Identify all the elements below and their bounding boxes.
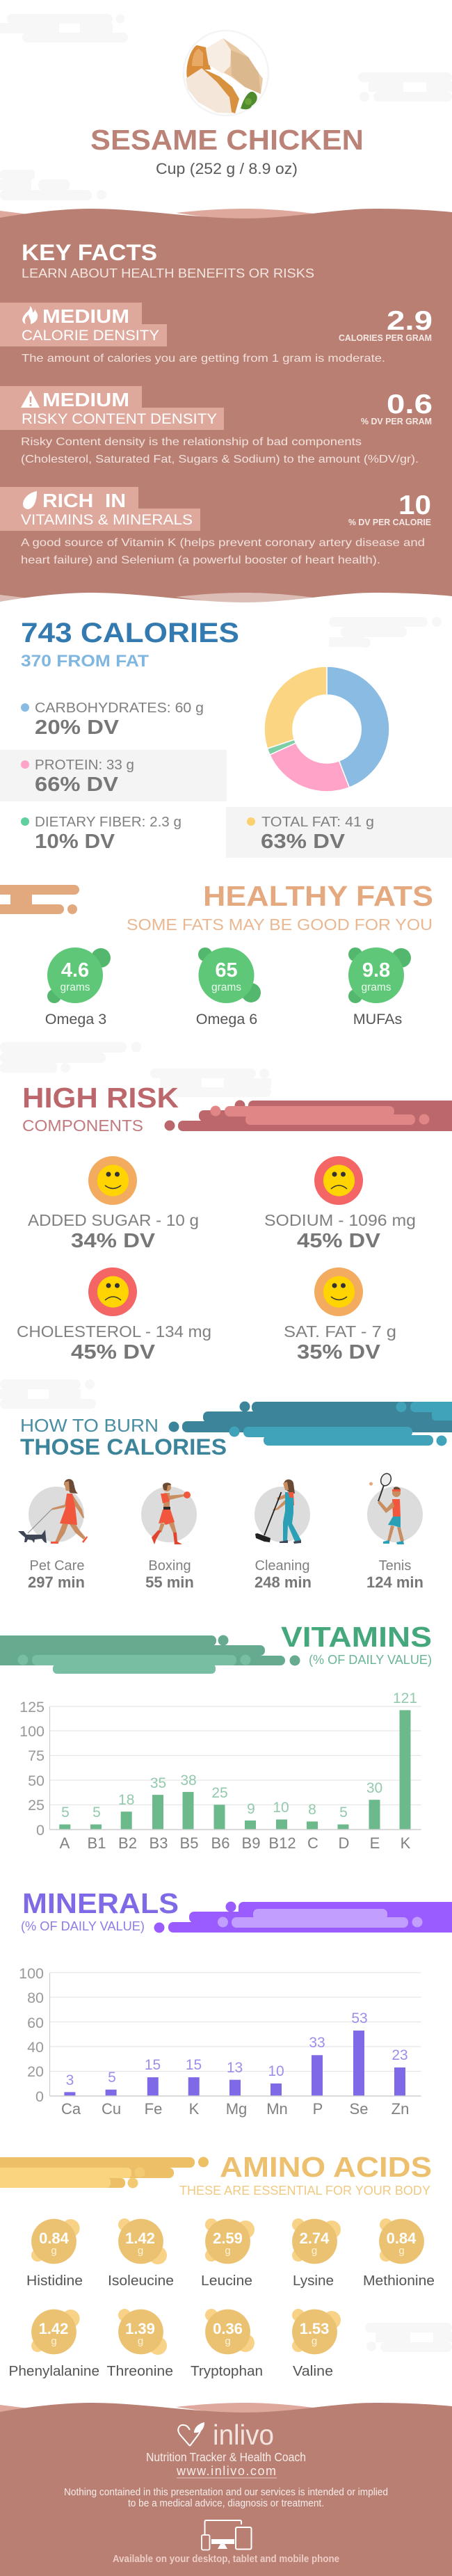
heading: how to burn: HOW TO BURN <box>20 1415 159 1436</box>
banner shape <box>164 1101 452 1131</box>
label: pet care: 297 min <box>28 1574 85 1591</box>
unit: % DV PER GRAM <box>361 417 432 426</box>
icon: flame <box>22 306 38 324</box>
stat: omega 6 <box>196 947 261 1027</box>
disclaimer <box>64 2486 388 2509</box>
banner shape <box>0 1635 300 1674</box>
stat: omega 3: 4.6 <box>61 959 89 982</box>
panel: vitamins <box>0 1621 432 1852</box>
item: cholesterol: CHOLESTEROL - 134 mg <box>17 1322 211 1341</box>
item: added sugar: ADDED SUGAR - 10 g <box>28 1211 199 1229</box>
bar chart: vitamins: 125 <box>19 1699 45 1715</box>
stat: mufas <box>348 947 411 1027</box>
amino: tryptophan: 0.36 <box>213 2320 243 2337</box>
item: sodium: 45% DV <box>297 1230 381 1252</box>
panel: high risk components <box>17 1082 452 1363</box>
label: tenis: 124 min <box>366 1574 423 1591</box>
bar chart: vitamins: 9 <box>247 1801 255 1817</box>
value: 2.9 <box>387 306 433 336</box>
legend: carbohydrates <box>21 700 204 739</box>
description: A good source of Vitamin K (helps prevent coronary artery disease and <box>21 537 425 549</box>
bar chart: vitamins: 5 <box>339 1805 348 1821</box>
stat: omega 3: grams <box>60 982 90 993</box>
item: sodium <box>264 1156 416 1252</box>
fact: risky content density <box>0 386 433 465</box>
unit: CALORIES PER GRAM <box>339 333 432 343</box>
bar chart: minerals: 5 <box>108 2070 116 2086</box>
bar chart: vitamins: 8 <box>308 1802 316 1818</box>
bar chart: minerals: 40 <box>27 2039 44 2056</box>
availability note: Available on your desktop, tablet and mobile phone <box>113 2553 339 2565</box>
bar chart: vitamins: B1 <box>88 1834 106 1852</box>
activity: cleaning <box>255 1480 310 1544</box>
label: pet care <box>28 1558 85 1591</box>
bar chart: minerals: 53 <box>351 2010 368 2026</box>
fact: calorie density <box>0 303 433 365</box>
bar chart: minerals: 33 <box>309 2035 325 2051</box>
bar chart: minerals: P <box>313 2100 323 2118</box>
item: saturated fat: 35% DV <box>297 1341 381 1363</box>
highlight box: protein <box>0 750 227 801</box>
highlight box: total fat <box>226 807 452 858</box>
bar chart: vitamins: K <box>401 1834 411 1852</box>
bar chart: minerals: K <box>189 2100 200 2118</box>
amino: isoleucine <box>108 2218 174 2289</box>
label: RISKY CONTENT DENSITY <box>22 411 217 427</box>
amino: lysine: g <box>312 2245 317 2257</box>
amino: threonine: 1.39 <box>125 2320 155 2337</box>
stat: omega 6: 65 <box>215 959 238 982</box>
amino: lysine <box>292 2218 341 2289</box>
panel: minerals <box>19 1887 452 2118</box>
bar chart: minerals: 15 <box>145 2057 161 2073</box>
bar chart: vitamins: A <box>60 1834 70 1852</box>
amino: methionine <box>363 2218 435 2289</box>
description: heart failure) and Selenium (a powerful booster of heart health). <box>21 554 380 566</box>
icon: warning triangle <box>21 390 40 408</box>
amino: lysine: 2.74 <box>300 2230 330 2247</box>
amino: phenylalanine: g <box>51 2335 57 2347</box>
panel: calories and macronutrients <box>0 618 452 858</box>
bar chart: vitamins: E <box>370 1834 380 1852</box>
donut chart <box>264 666 389 792</box>
serving size: Cup (252 g / 8.9 oz) <box>156 160 298 177</box>
amino: valine: Valine <box>293 2364 333 2379</box>
bar chart: vitamins: 25 <box>211 1785 228 1801</box>
amino: leucine: g <box>225 2245 231 2257</box>
label: VITAMINS & MINERALS <box>21 512 193 528</box>
bar chart: vitamins: 50 <box>28 1773 45 1789</box>
fact: rich in vitamins and minerals <box>0 487 431 566</box>
bar chart: minerals: 13 <box>227 2060 243 2076</box>
disclaimer: Nothing contained in this presentation and our services is intended or implied <box>64 2486 388 2498</box>
tagline: Nutrition Tracker & Health Coach <box>146 2450 306 2464</box>
subheading: calories from fat: 370 FROM FAT <box>21 652 149 671</box>
rating: MEDIUM <box>42 389 129 410</box>
website link: www.inlivo.com <box>176 2464 276 2478</box>
amino: threonine <box>107 2309 173 2379</box>
bar chart: vitamins: 25 <box>28 1797 45 1814</box>
legend: total fat: TOTAL FAT: 41 g <box>261 814 374 830</box>
label: boxing <box>145 1558 194 1591</box>
bar chart: minerals: 15 <box>186 2057 202 2073</box>
panel: food header <box>90 31 364 177</box>
bar chart: vitamins: 18 <box>118 1792 134 1808</box>
legend: carbohydrates: CARBOHYDRATES: 60 g <box>35 700 204 716</box>
amino: methionine: Methionine <box>363 2273 435 2289</box>
legend: protein: PROTEIN: 33 g <box>35 757 134 773</box>
amino: phenylalanine <box>8 2310 99 2379</box>
legend: carbohydrates: 20% DV <box>35 717 120 739</box>
bar chart: vitamins: B5 <box>180 1834 198 1852</box>
panel: footer <box>0 2403 452 2576</box>
bar chart: minerals: 80 <box>27 1990 44 2006</box>
amino: valine: 1.53 <box>300 2320 329 2337</box>
bar chart: vitamins: B6 <box>211 1834 229 1852</box>
item: added sugar: 34% DV <box>71 1230 156 1252</box>
label: CALORIE DENSITY <box>22 328 159 344</box>
amino: methionine: g <box>398 2245 405 2257</box>
bar chart: minerals: 0 <box>35 2088 44 2105</box>
heading: calories: 743 CALORIES <box>21 618 239 648</box>
bar chart: minerals: 60 <box>27 2015 44 2031</box>
bar chart: vitamins: 121 <box>393 1690 417 1706</box>
legend: dietary fiber: 10% DV <box>35 831 115 853</box>
activity: tennis <box>367 1472 423 1544</box>
bar chart: vitamins <box>19 1690 421 1852</box>
description <box>21 537 425 566</box>
bar chart: vitamins: B9 <box>242 1834 260 1852</box>
subheading: (% OF DAILY VALUE) <box>309 1653 432 1667</box>
label: cleaning: 248 min <box>255 1574 312 1591</box>
heading: those calories: THOSE CALORIES <box>20 1434 227 1459</box>
heading: key facts: KEY FACTS <box>22 240 157 265</box>
bar chart: vitamins: B3 <box>150 1834 168 1852</box>
heading: HIGH RISK <box>22 1082 179 1114</box>
bar chart: vitamins: 38 <box>180 1773 197 1789</box>
heading: AMINO ACIDS <box>220 2151 432 2183</box>
stat: omega 6: grams <box>211 982 241 993</box>
heading: MINERALS <box>22 1887 179 1919</box>
bar chart: vitamins: 35 <box>150 1775 166 1791</box>
item: cholesterol: 45% DV <box>71 1341 156 1363</box>
amino: histidine: 0.84 <box>39 2230 70 2247</box>
label: tenis: Tenis <box>379 1558 411 1574</box>
legend: total fat <box>247 814 374 853</box>
description: The amount of calories you are getting from 1 gram is moderate. <box>22 353 385 365</box>
panel: amino acids <box>0 2151 435 2379</box>
amino: leucine: Leucine <box>201 2273 252 2289</box>
amino: valine: g <box>312 2335 317 2347</box>
amino: tryptophan: g <box>225 2335 231 2347</box>
item: cholesterol <box>17 1267 211 1363</box>
item: added sugar <box>28 1156 199 1252</box>
description: (Cholesterol, Saturated Fat, Sugars & Sodium) to the amount (%DV/gr). <box>21 454 419 465</box>
bar chart: minerals: Ca <box>61 2100 81 2118</box>
bar chart: vitamins: 10 <box>273 1800 289 1816</box>
logo: inlivo: inlivo <box>213 2419 274 2451</box>
banner shape <box>154 1902 452 1933</box>
amino: leucine: 2.59 <box>213 2230 243 2247</box>
bar chart: vitamins: 100 <box>19 1723 45 1740</box>
bar chart: minerals <box>19 1965 421 2118</box>
label: cleaning <box>255 1558 312 1591</box>
bar chart: vitamins: 30 <box>366 1780 382 1796</box>
amino: valine <box>292 2309 341 2379</box>
legend: protein: 66% DV <box>35 774 119 796</box>
amino: isoleucine: Isoleucine <box>108 2273 174 2289</box>
stat: omega 3 <box>45 947 111 1027</box>
amino: methionine: 0.84 <box>387 2230 417 2247</box>
bar chart: vitamins: B12 <box>268 1834 296 1852</box>
amino: isoleucine: 1.42 <box>125 2230 155 2247</box>
item: saturated fat: SAT. FAT - 7 g <box>284 1322 396 1341</box>
label: cleaning: Cleaning <box>255 1558 309 1574</box>
panel: healthy fats <box>0 880 433 1027</box>
amino: lysine: Lysine <box>293 2273 334 2289</box>
amino: threonine: Threonine <box>107 2364 173 2379</box>
bar chart: vitamins: 5 <box>61 1805 70 1821</box>
amino: histidine: g <box>51 2245 57 2257</box>
item: saturated fat <box>284 1267 396 1363</box>
bar chart: minerals: 23 <box>392 2047 408 2063</box>
banner shape <box>168 1401 452 1446</box>
bar chart: minerals: Se <box>350 2100 368 2118</box>
activity: boxing <box>141 1482 197 1544</box>
unit: % DV PER CALORIE <box>348 518 431 527</box>
amino: phenylalanine: Phenylalanine <box>8 2364 99 2379</box>
title: SESAME CHICKEN <box>90 124 364 156</box>
stat: mufas: grams <box>361 982 392 993</box>
bar chart: minerals: Fe <box>145 2100 162 2118</box>
description: Risky Content density is the relationship of bad components <box>21 436 362 448</box>
label: tenis <box>366 1558 423 1591</box>
legend: total fat: 63% DV <box>261 831 346 853</box>
bar chart: vitamins: B2 <box>118 1834 137 1852</box>
description <box>21 436 419 465</box>
legend: protein <box>21 757 134 796</box>
subheading: LEARN ABOUT HEALTH BENEFITS OR RISKS <box>22 266 314 280</box>
subheading: THESE ARE ESSENTIAL FOR YOUR BODY <box>179 2183 430 2198</box>
bar chart: vitamins: 75 <box>28 1747 45 1764</box>
icon: devices <box>202 2520 252 2550</box>
logo: inlivo <box>178 2419 274 2451</box>
bar chart: minerals: 10 <box>268 2063 284 2079</box>
stat: mufas: 9.8 <box>362 959 390 982</box>
stat: omega 6: Omega 6 <box>196 1011 257 1027</box>
amino: isoleucine: g <box>138 2245 143 2257</box>
subheading: SOME FATS MAY BE GOOD FOR YOU <box>127 915 433 934</box>
bar chart: minerals: Zn <box>392 2100 409 2118</box>
subheading: (% OF DAILY VALUE) <box>21 1919 145 1933</box>
rating: RICH IN <box>42 490 126 511</box>
label: boxing: 55 min <box>145 1574 194 1591</box>
bar chart: minerals: Cu <box>102 2100 121 2118</box>
bar chart: vitamins: C <box>307 1834 318 1852</box>
heading: VITAMINS <box>281 1621 432 1653</box>
amino: phenylalanine: 1.42 <box>39 2320 68 2337</box>
legend: dietary fiber: DIETARY FIBER: 2.3 g <box>35 814 181 830</box>
item: sodium: SODIUM - 1096 mg <box>264 1211 416 1229</box>
subheading: COMPONENTS <box>22 1117 143 1135</box>
legend: dietary fiber <box>21 814 181 853</box>
bar chart: minerals: 100 <box>19 1965 44 1982</box>
banner shape <box>0 885 79 914</box>
rating: MEDIUM <box>42 305 129 327</box>
bar chart: vitamins: 0 <box>36 1822 45 1839</box>
amino: threonine: g <box>138 2335 143 2347</box>
value: 0.6 <box>387 390 433 419</box>
amino: leucine <box>201 2218 255 2289</box>
bar chart: vitamins: D <box>339 1834 349 1852</box>
amino: histidine: Histidine <box>26 2273 83 2289</box>
stat: omega 3: Omega 3 <box>45 1011 106 1027</box>
heading: HEALTHY FATS <box>203 880 433 912</box>
label: pet care: Pet Care <box>30 1558 84 1574</box>
panel: how to burn calories <box>18 1401 452 1591</box>
banner shape <box>0 2157 209 2189</box>
activity: pet care <box>18 1479 88 1544</box>
food photo: sliced chicken <box>184 31 268 115</box>
panel: key facts <box>0 209 452 612</box>
disclaimer: to be a medical advice, diagnosis or treatment. <box>128 2497 324 2509</box>
stat: mufas: MUFAs <box>353 1011 402 1027</box>
bar chart: minerals: 20 <box>27 2063 44 2080</box>
amino: tryptophan: Tryptophan <box>191 2364 263 2379</box>
value: 10 <box>398 490 431 520</box>
icon: leaf <box>23 491 37 509</box>
label: boxing: Boxing <box>148 1558 191 1574</box>
bar chart: vitamins: 5 <box>92 1805 101 1821</box>
bar chart: minerals: Mn <box>266 2100 288 2118</box>
amino: tryptophan <box>191 2309 263 2379</box>
bar chart: minerals: Mg <box>226 2100 247 2118</box>
bar chart: minerals: 3 <box>66 2072 74 2088</box>
amino: histidine <box>26 2219 83 2289</box>
